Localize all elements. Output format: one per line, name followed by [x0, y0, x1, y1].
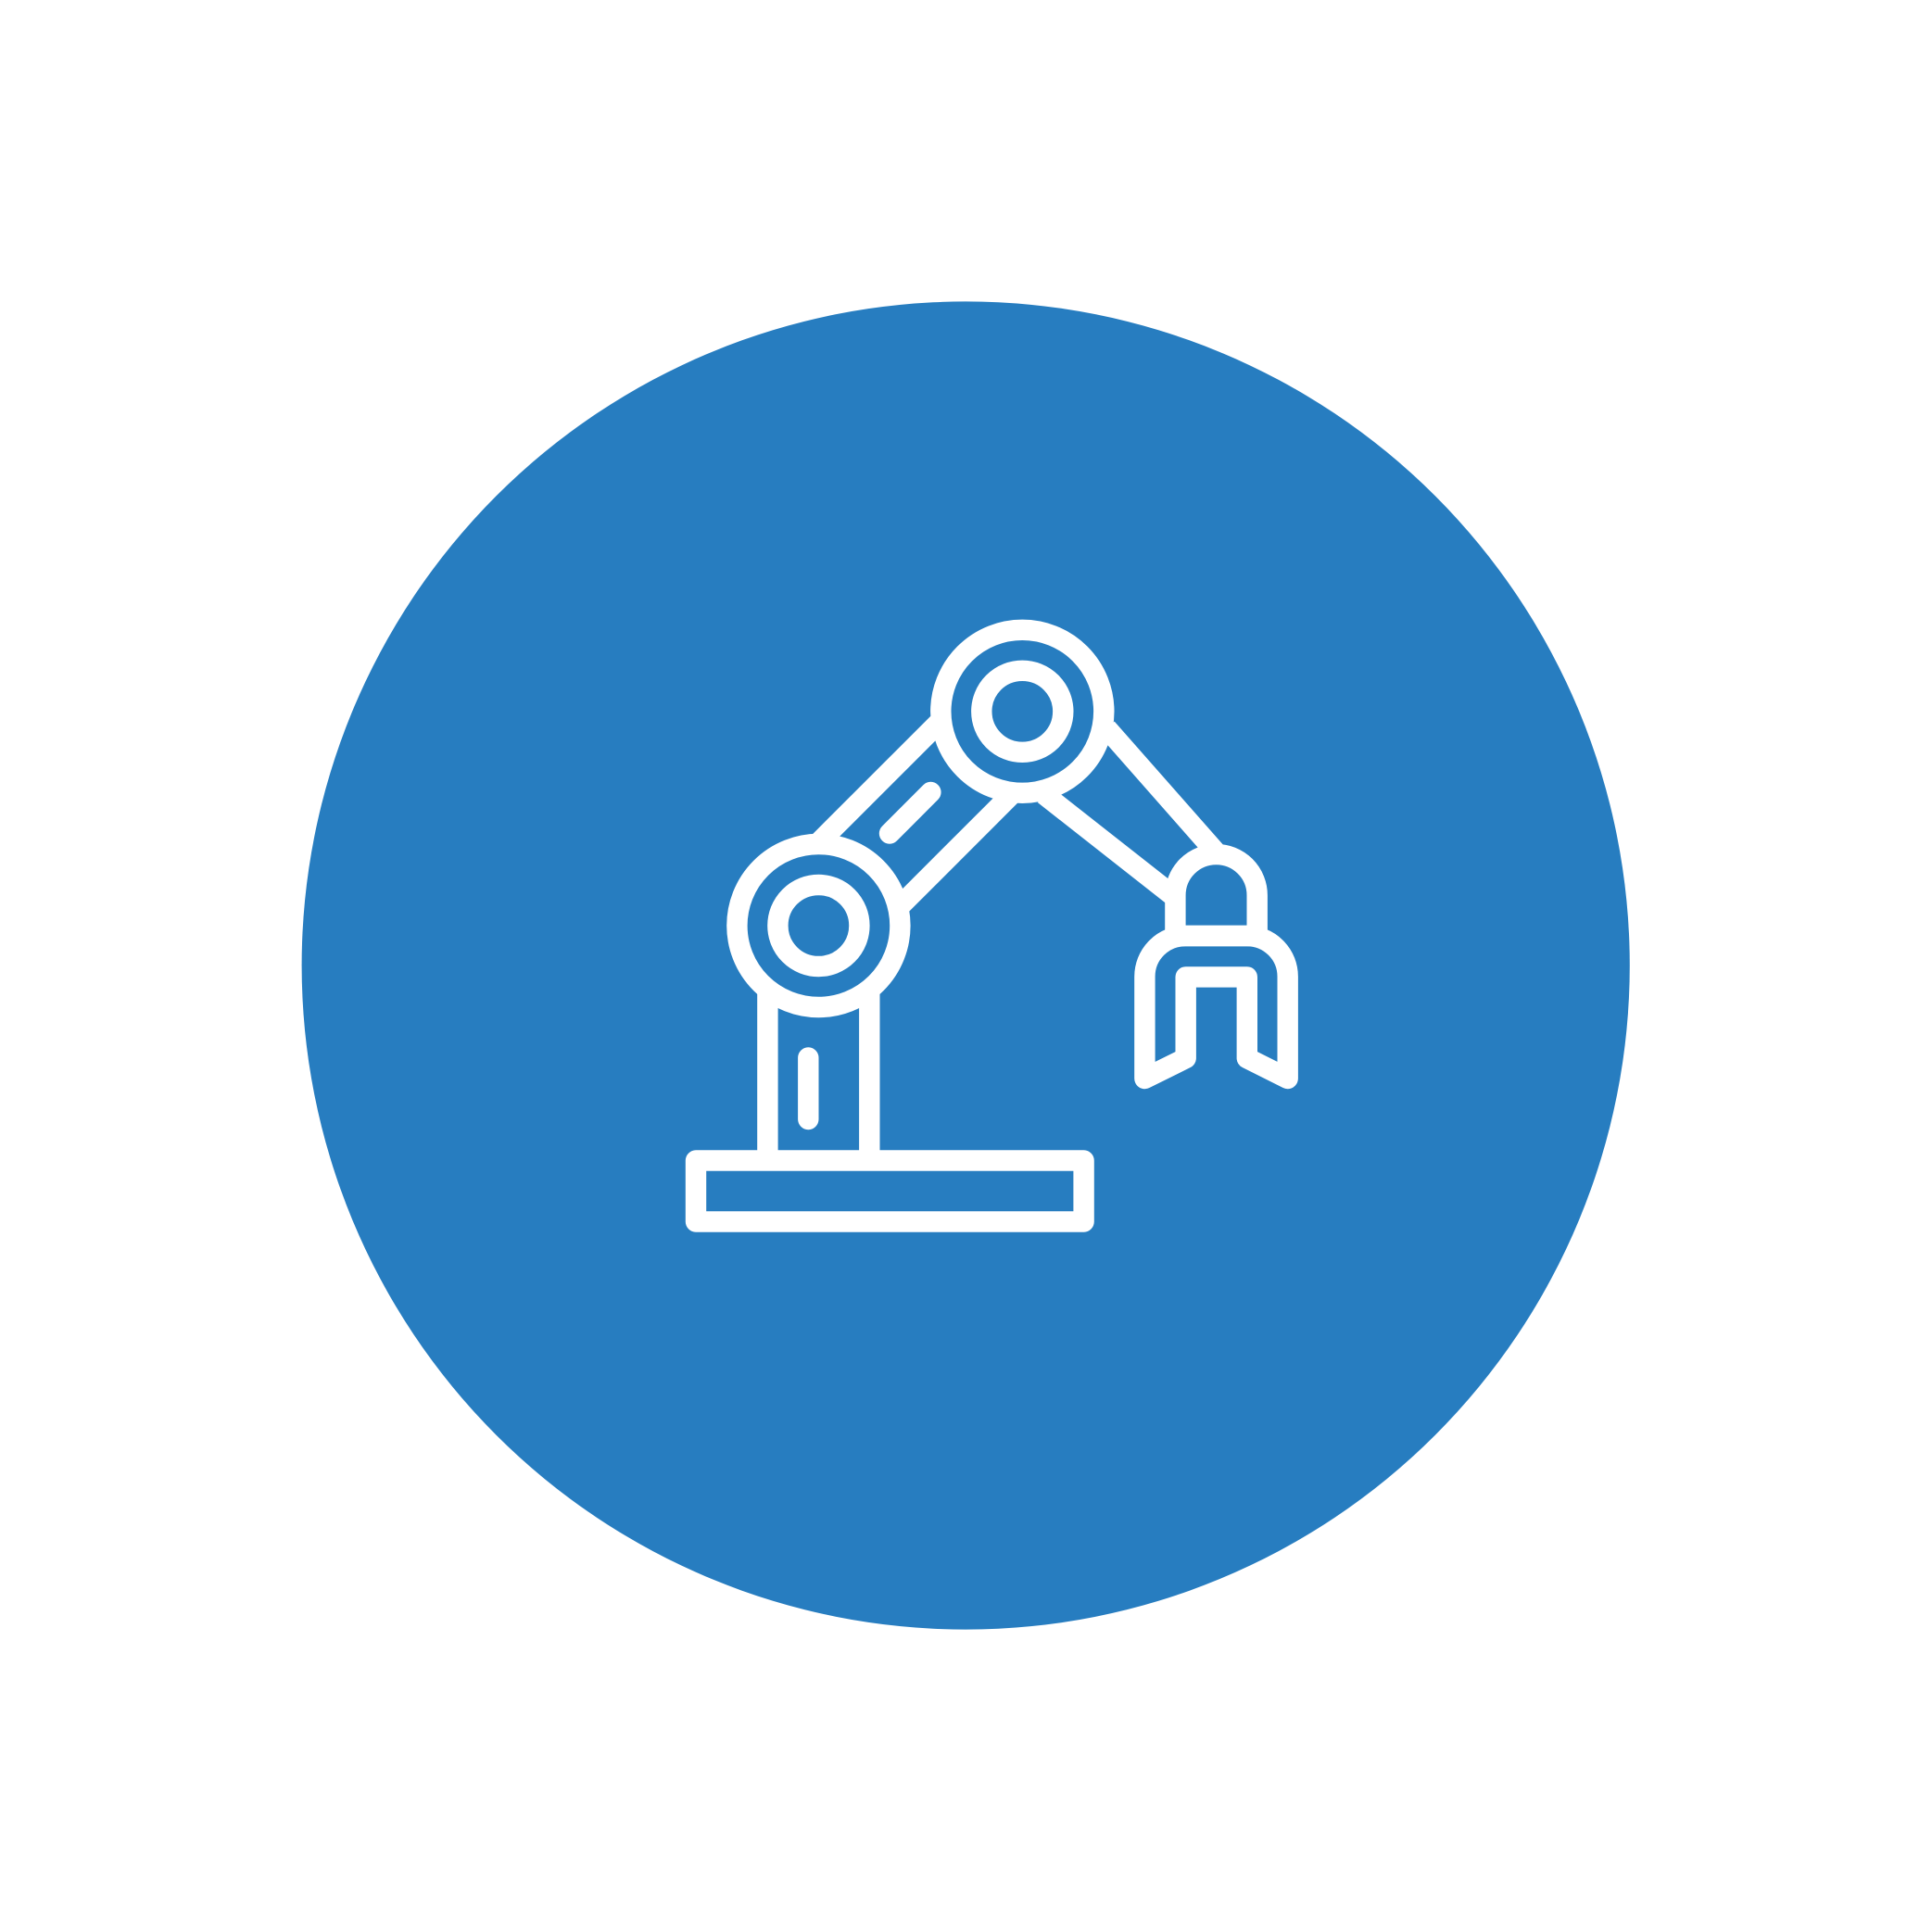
pillar — [767, 989, 869, 1160]
blue circle background — [302, 301, 1630, 1630]
upper joint — [941, 630, 1104, 793]
upper joint outer ring — [941, 630, 1104, 793]
base plate — [696, 1160, 1084, 1221]
upper arm bottom edge — [1044, 794, 1175, 897]
lower arm segment — [817, 720, 1014, 908]
lower arm lower edge — [899, 792, 1014, 908]
lower arm upper edge — [817, 720, 941, 844]
pillar right wall — [859, 989, 879, 1160]
upper joint inner ring — [981, 671, 1063, 752]
pillar left wall — [757, 989, 778, 1160]
upper arm top edge — [1106, 728, 1215, 852]
upper arm segment — [1044, 728, 1215, 897]
gripper claw — [1144, 936, 1288, 1079]
lower joint outer ring — [737, 844, 900, 1007]
pillar highlight bar — [798, 1058, 818, 1119]
wrist — [1175, 854, 1257, 936]
icon: robotic arm — [696, 630, 1288, 1221]
lower arm highlight bar — [890, 792, 930, 834]
lower joint — [737, 844, 900, 1007]
lower joint inner ring — [777, 885, 859, 966]
